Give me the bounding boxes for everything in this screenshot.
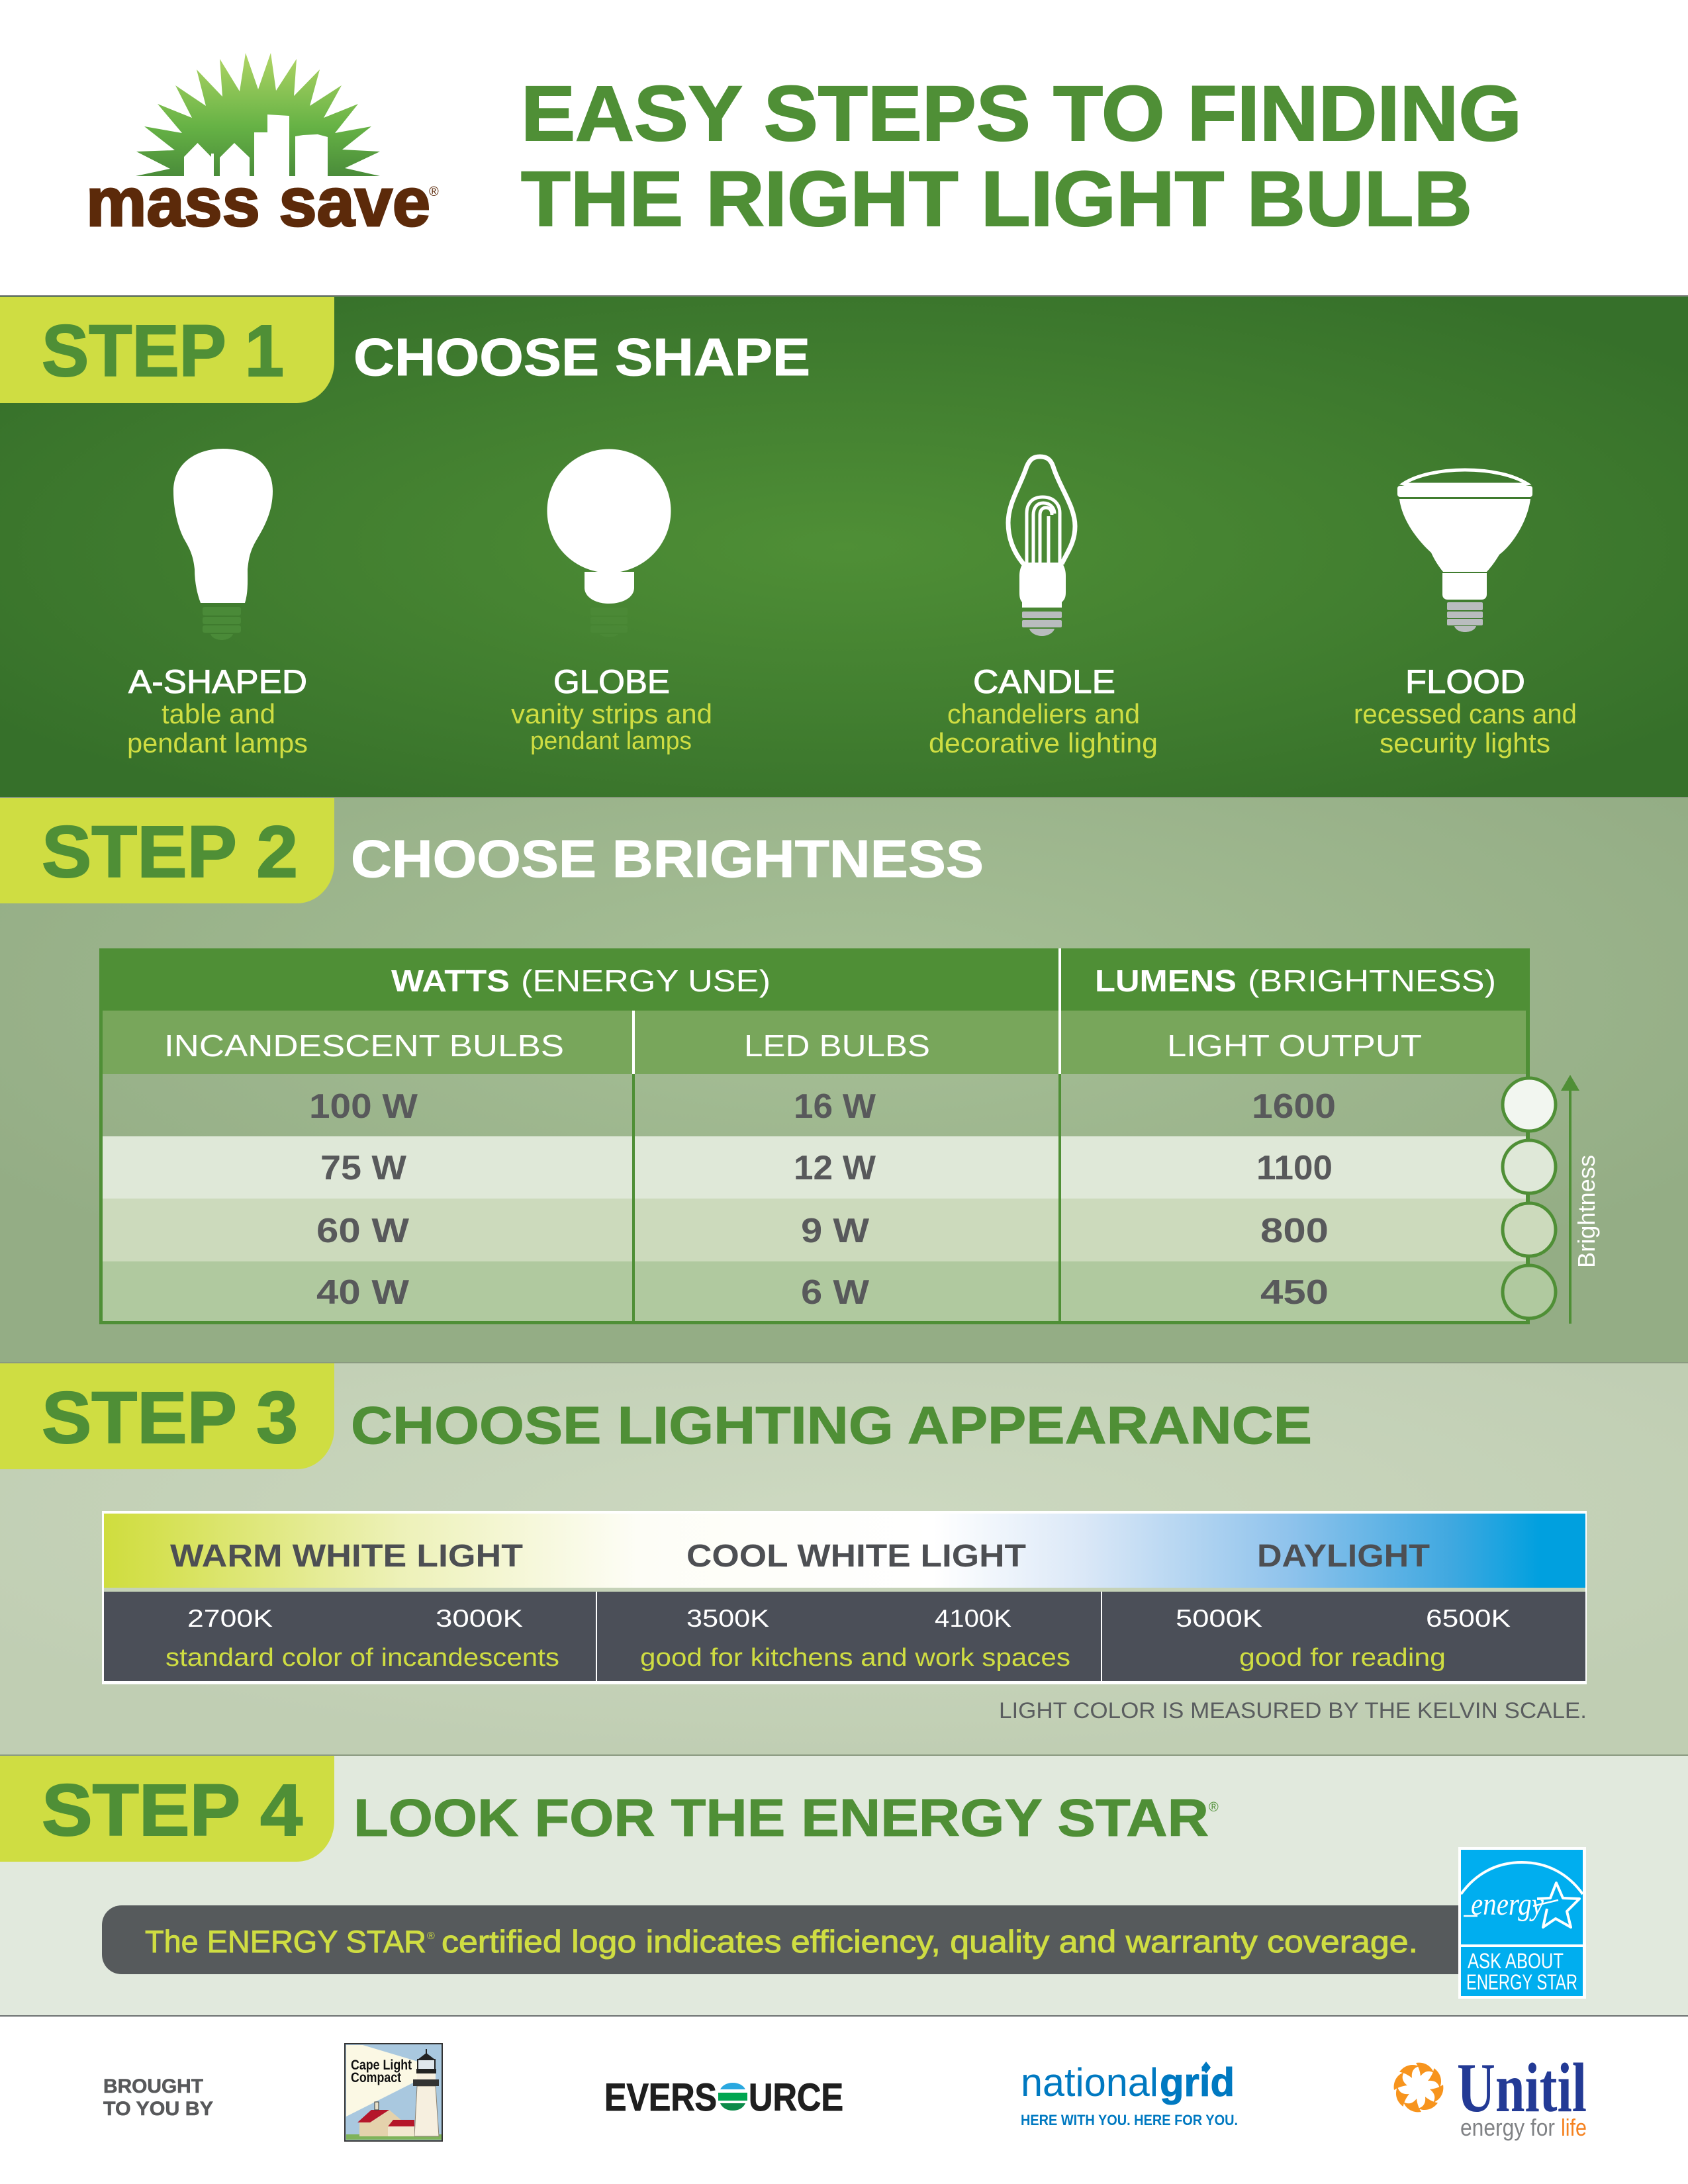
logo: unitil: life [1561,2114,1587,2141]
kelvin note: LIGHT COLOR IS MEASURED BY THE KELVIN SCALE. [999,1698,1587,1723]
table header: watts [391,964,771,998]
label: candle: chandeliers and [947,698,1140,729]
step 1 tab [0,297,334,403]
logo: eversource [604,2076,843,2119]
column: warm white light: WARM WHITE LIGHT [170,1539,523,1574]
text: brought to you by: TO YOU BY [103,2098,213,2120]
column: cool white light: good for kitchens and work spaces [640,1644,1070,1672]
column: daylight: 6500K [1426,1605,1511,1632]
table header: watts: (ENERGY USE) [521,964,771,998]
column headers [164,1028,1422,1063]
callout bar: ® [427,1931,435,1942]
table header: lumens [1095,964,1496,998]
panel: step 4 look for the energy star [0,1754,1688,2016]
heading: choose brightness: CHOOSE BRIGHTNESS [351,829,984,888]
column: warm white light: 3000K [436,1605,523,1632]
table header: lumens: LUMENS [1095,964,1237,998]
logo: unitil [1390,2049,1587,2141]
column: warm white light: standard color of incandescents [165,1644,559,1672]
label: flood: recessed cans and [1354,698,1577,729]
icon: candle bulb [1008,457,1075,636]
icon: unitil swirl [1390,2059,1447,2116]
column: cool white light: 4100K [935,1605,1011,1632]
table row: 1100 lumens: 75 W [320,1149,407,1187]
logo: eversource: URCE [749,2076,843,2119]
table row: 1600 lumens: 100 W [309,1087,418,1126]
step 4 tab: STEP 4 [42,1770,303,1851]
logo: national grid: national [1021,2060,1158,2105]
table row: 800 lumens: 800 [1260,1212,1329,1250]
column: cool white light: COOL WHITE LIGHT [686,1539,1026,1574]
callout bar: certified logo indicates efficiency, quality and warranty coverage. [442,1924,1418,1959]
label: candle: CANDLE [973,663,1115,700]
label: globe: pendant lamps [530,727,692,755]
label: candle: decorative lighting [929,727,1158,758]
logo: cape light compact: Cape Light [351,2058,412,2073]
table row: 1600 lumens [309,1087,1336,1126]
logo: unitil: energy for [1460,2114,1555,2141]
title: THE RIGHT LIGHT BULB [521,156,1472,243]
logo: national grid [1021,2060,1238,2128]
logo: mass save [86,53,439,241]
column headers: INCANDESCENT BULBS [164,1028,564,1063]
text: brought to you by [103,2075,213,2120]
step 3 tab: STEP 3 [42,1377,298,1459]
panel: step 2 choose brightness [0,797,1688,1362]
label: flood: security lights [1380,727,1550,758]
logo: national grid: HERE WITH YOU. HERE FOR YOU. [1021,2112,1238,2128]
kelvin scale table [102,1511,1587,1684]
table row: 1600 lumens: 16 W [794,1087,876,1126]
icon: globe bulb [547,449,671,637]
logo: energy star: ASK ABOUT [1468,1949,1564,1973]
table row: 800 lumens [316,1212,1329,1250]
logo: unitil: Unitil [1457,2049,1587,2126]
arrow: brightness [1561,1075,1579,1324]
column headers: LED BULBS [744,1028,930,1063]
panel: step 3 choose lighting appearance [0,1362,1688,1755]
logo: cape light compact: Compact [351,2070,401,2085]
table row: 1100 lumens [320,1149,1333,1187]
logo: energy star: energy [1471,1887,1544,1922]
logo: eversource: EVERS [604,2076,717,2119]
label: a-shaped [127,663,308,758]
column: warm white light [165,1539,559,1672]
title: EASY STEPS TO FINDING [521,70,1522,158]
logo: cape light compact [345,2044,442,2141]
header [0,0,1688,296]
panel: step 1 choose shape [0,295,1688,797]
label: globe: GLOBE [553,663,670,700]
table header: lumens: (BRIGHTNESS) [1248,964,1496,998]
heading: look for the energy star: ® [1209,1800,1219,1815]
table row: 450 lumens: 40 W [316,1273,410,1312]
brightness table [99,948,1530,1324]
label: a-shaped: table and [162,698,275,729]
step 3 tab [0,1363,334,1469]
lighthouse [413,2049,439,2136]
heading: choose shape: CHOOSE SHAPE [353,328,810,387]
logo: mass save: mass save [86,164,430,241]
gradient strip [104,1514,1585,1588]
table row: 450 lumens: 6 W [801,1273,870,1312]
table header: watts: WATTS [391,964,510,998]
column: warm white light: 2700K [187,1605,273,1632]
logo: mass save: ® [429,185,439,199]
brightness level circles [1503,1078,1556,1318]
column: daylight [1176,1539,1511,1672]
text: brought to you by: BROUGHT [103,2075,203,2097]
step 2 tab: STEP 2 [42,811,298,893]
table row: 1600 lumens: 1600 [1252,1087,1336,1126]
heading: look for the energy star: LOOK FOR THE ENERGY STAR [353,1788,1209,1847]
column: cool white light [640,1539,1070,1672]
column: cool white light: 3500K [686,1605,769,1632]
column: daylight: 5000K [1176,1605,1262,1632]
heading: choose lighting appearance: CHOOSE LIGHTING APPEARANCE [351,1396,1312,1455]
icon: flood bulb [1397,470,1532,632]
table row: 1100 lumens: 1100 [1256,1149,1333,1187]
column: daylight: DAYLIGHT [1257,1539,1430,1574]
label: flood [1354,663,1577,758]
label: globe [511,663,712,755]
logo: energy star [1458,1847,1586,1999]
table row: 450 lumens [316,1273,1329,1312]
table row: 450 lumens: 450 [1260,1273,1329,1312]
step 1 tab: STEP 1 [42,310,284,392]
label: a-shaped: A-SHAPED [128,663,307,700]
label: globe: vanity strips and [511,698,712,729]
table row: 800 lumens: 60 W [316,1212,410,1250]
label: brightness: Brightness [1573,1155,1600,1268]
callout bar [102,1905,1460,1974]
label: candle [929,663,1158,758]
logo: national grid: grid [1160,2060,1235,2105]
footer: sponsors [0,2015,1688,2184]
icon: a-shaped bulb [173,449,273,640]
keeper's house [357,2102,414,2136]
label: a-shaped: pendant lamps [127,727,308,758]
table row: 800 lumens: 9 W [801,1212,870,1250]
callout bar: The ENERGY STAR [145,1924,426,1959]
logo: energy star: ENERGY STAR [1466,1970,1577,1994]
column: daylight: good for reading [1239,1644,1446,1672]
label: flood: FLOOD [1405,663,1525,700]
table row: 1100 lumens: 12 W [794,1149,876,1187]
column headers: LIGHT OUTPUT [1167,1028,1422,1063]
title [521,70,1522,243]
step 4 tab [0,1756,334,1862]
step 2 tab [0,798,334,903]
